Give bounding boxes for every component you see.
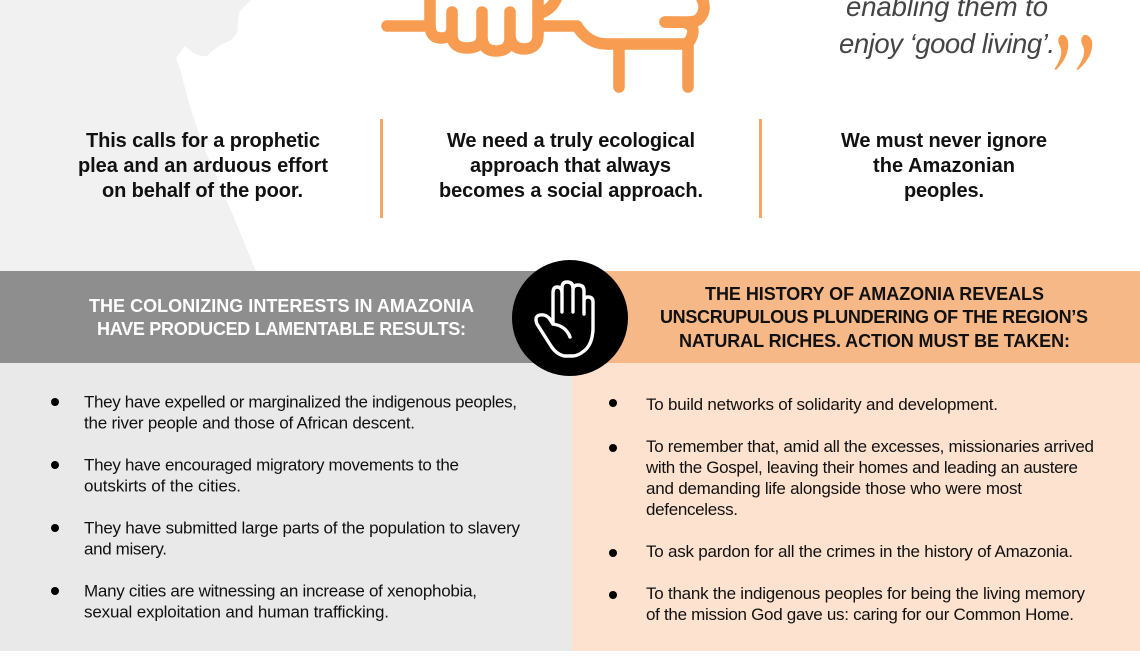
statement: ecological approach <box>439 130 703 202</box>
left bullet list: Many cities are witnessing an increase of xenophobia, <box>84 582 477 600</box>
left bullet list: They have submitted large parts of the population to slavery <box>84 518 520 538</box>
icon: raised hand in black circle <box>512 260 628 376</box>
right heading: THE HISTORY OF AMAZONIA REVEALS <box>705 284 1044 304</box>
left header band <box>0 271 572 363</box>
statement: ecological approach: approach that always <box>470 155 671 177</box>
left bullet list: and misery. <box>84 540 167 558</box>
right bullet list: To ask pardon for all the crimes in the history of Amazonia. <box>646 542 1073 561</box>
panel: colonizing interests <box>0 271 572 651</box>
statement: Amazonian peoples: We must never ignore <box>841 130 1047 152</box>
right bullet list: To remember that, amid all the excesses, missionaries arrived <box>646 437 1094 456</box>
background silhouette <box>0 0 256 271</box>
right heading: NATURAL RICHES. ACTION MUST BE TAKEN: <box>679 331 1070 351</box>
right bullet list: defenceless. <box>646 500 738 519</box>
right bullet list: with the Gospel, leaving their homes and leading an austere <box>645 458 1078 477</box>
left panel background <box>0 363 572 651</box>
statement: prophetic plea: This calls for a prophetic <box>86 130 320 152</box>
left bullet list: outskirts of the cities. <box>84 476 241 496</box>
statement: prophetic plea <box>78 130 328 202</box>
right bullet list: of the mission God gave us: caring for our Common Home. <box>646 605 1074 624</box>
statement: prophetic plea: plea and an arduous effort <box>78 155 328 177</box>
statement: Amazonian peoples: peoples. <box>904 180 984 202</box>
right panel background <box>572 363 1140 651</box>
quote text: enjoy ‘good living’. <box>839 28 1055 59</box>
left heading <box>89 296 474 339</box>
panel: history of Amazonia <box>572 271 1140 651</box>
statement: Amazonian peoples <box>841 130 1047 202</box>
statement: ecological approach: becomes a social approach. <box>439 180 703 202</box>
right heading: UNSCRUPULOUS PLUNDERING OF THE REGION’S <box>660 307 1088 327</box>
icon: orange clasped hands <box>387 0 704 87</box>
left heading: HAVE PRODUCED LAMENTABLE RESULTS: <box>97 319 466 339</box>
left bullet list: They have encouraged migratory movements to the <box>84 456 459 474</box>
statement: ecological approach: We need a truly ecological <box>447 130 695 152</box>
left bullet list <box>51 392 520 622</box>
right heading <box>660 284 1088 351</box>
right bullet list: To thank the indigenous peoples for being the living memory <box>646 584 1086 603</box>
statement: Amazonian peoples: the Amazonian <box>873 155 1015 177</box>
right bullet list: To build networks of solidarity and development. <box>646 395 998 414</box>
left bullet list: They have expelled or marginalized the indigenous peoples, <box>84 392 517 412</box>
icon: closing quotation marks <box>1054 35 1092 70</box>
left bullet list: sexual exploitation and human trafficking. <box>84 602 389 622</box>
left heading: THE COLONIZING INTERESTS IN AMAZONIA <box>89 296 474 316</box>
right bullet list <box>609 395 1094 624</box>
quote text <box>839 0 1055 59</box>
left bullet list: the river people and those of African descent. <box>84 414 415 432</box>
right header band <box>572 271 1140 363</box>
statement: prophetic plea: on behalf of the poor. <box>102 180 303 202</box>
right bullet list: and demanding life alongside those who were most <box>646 479 1022 498</box>
